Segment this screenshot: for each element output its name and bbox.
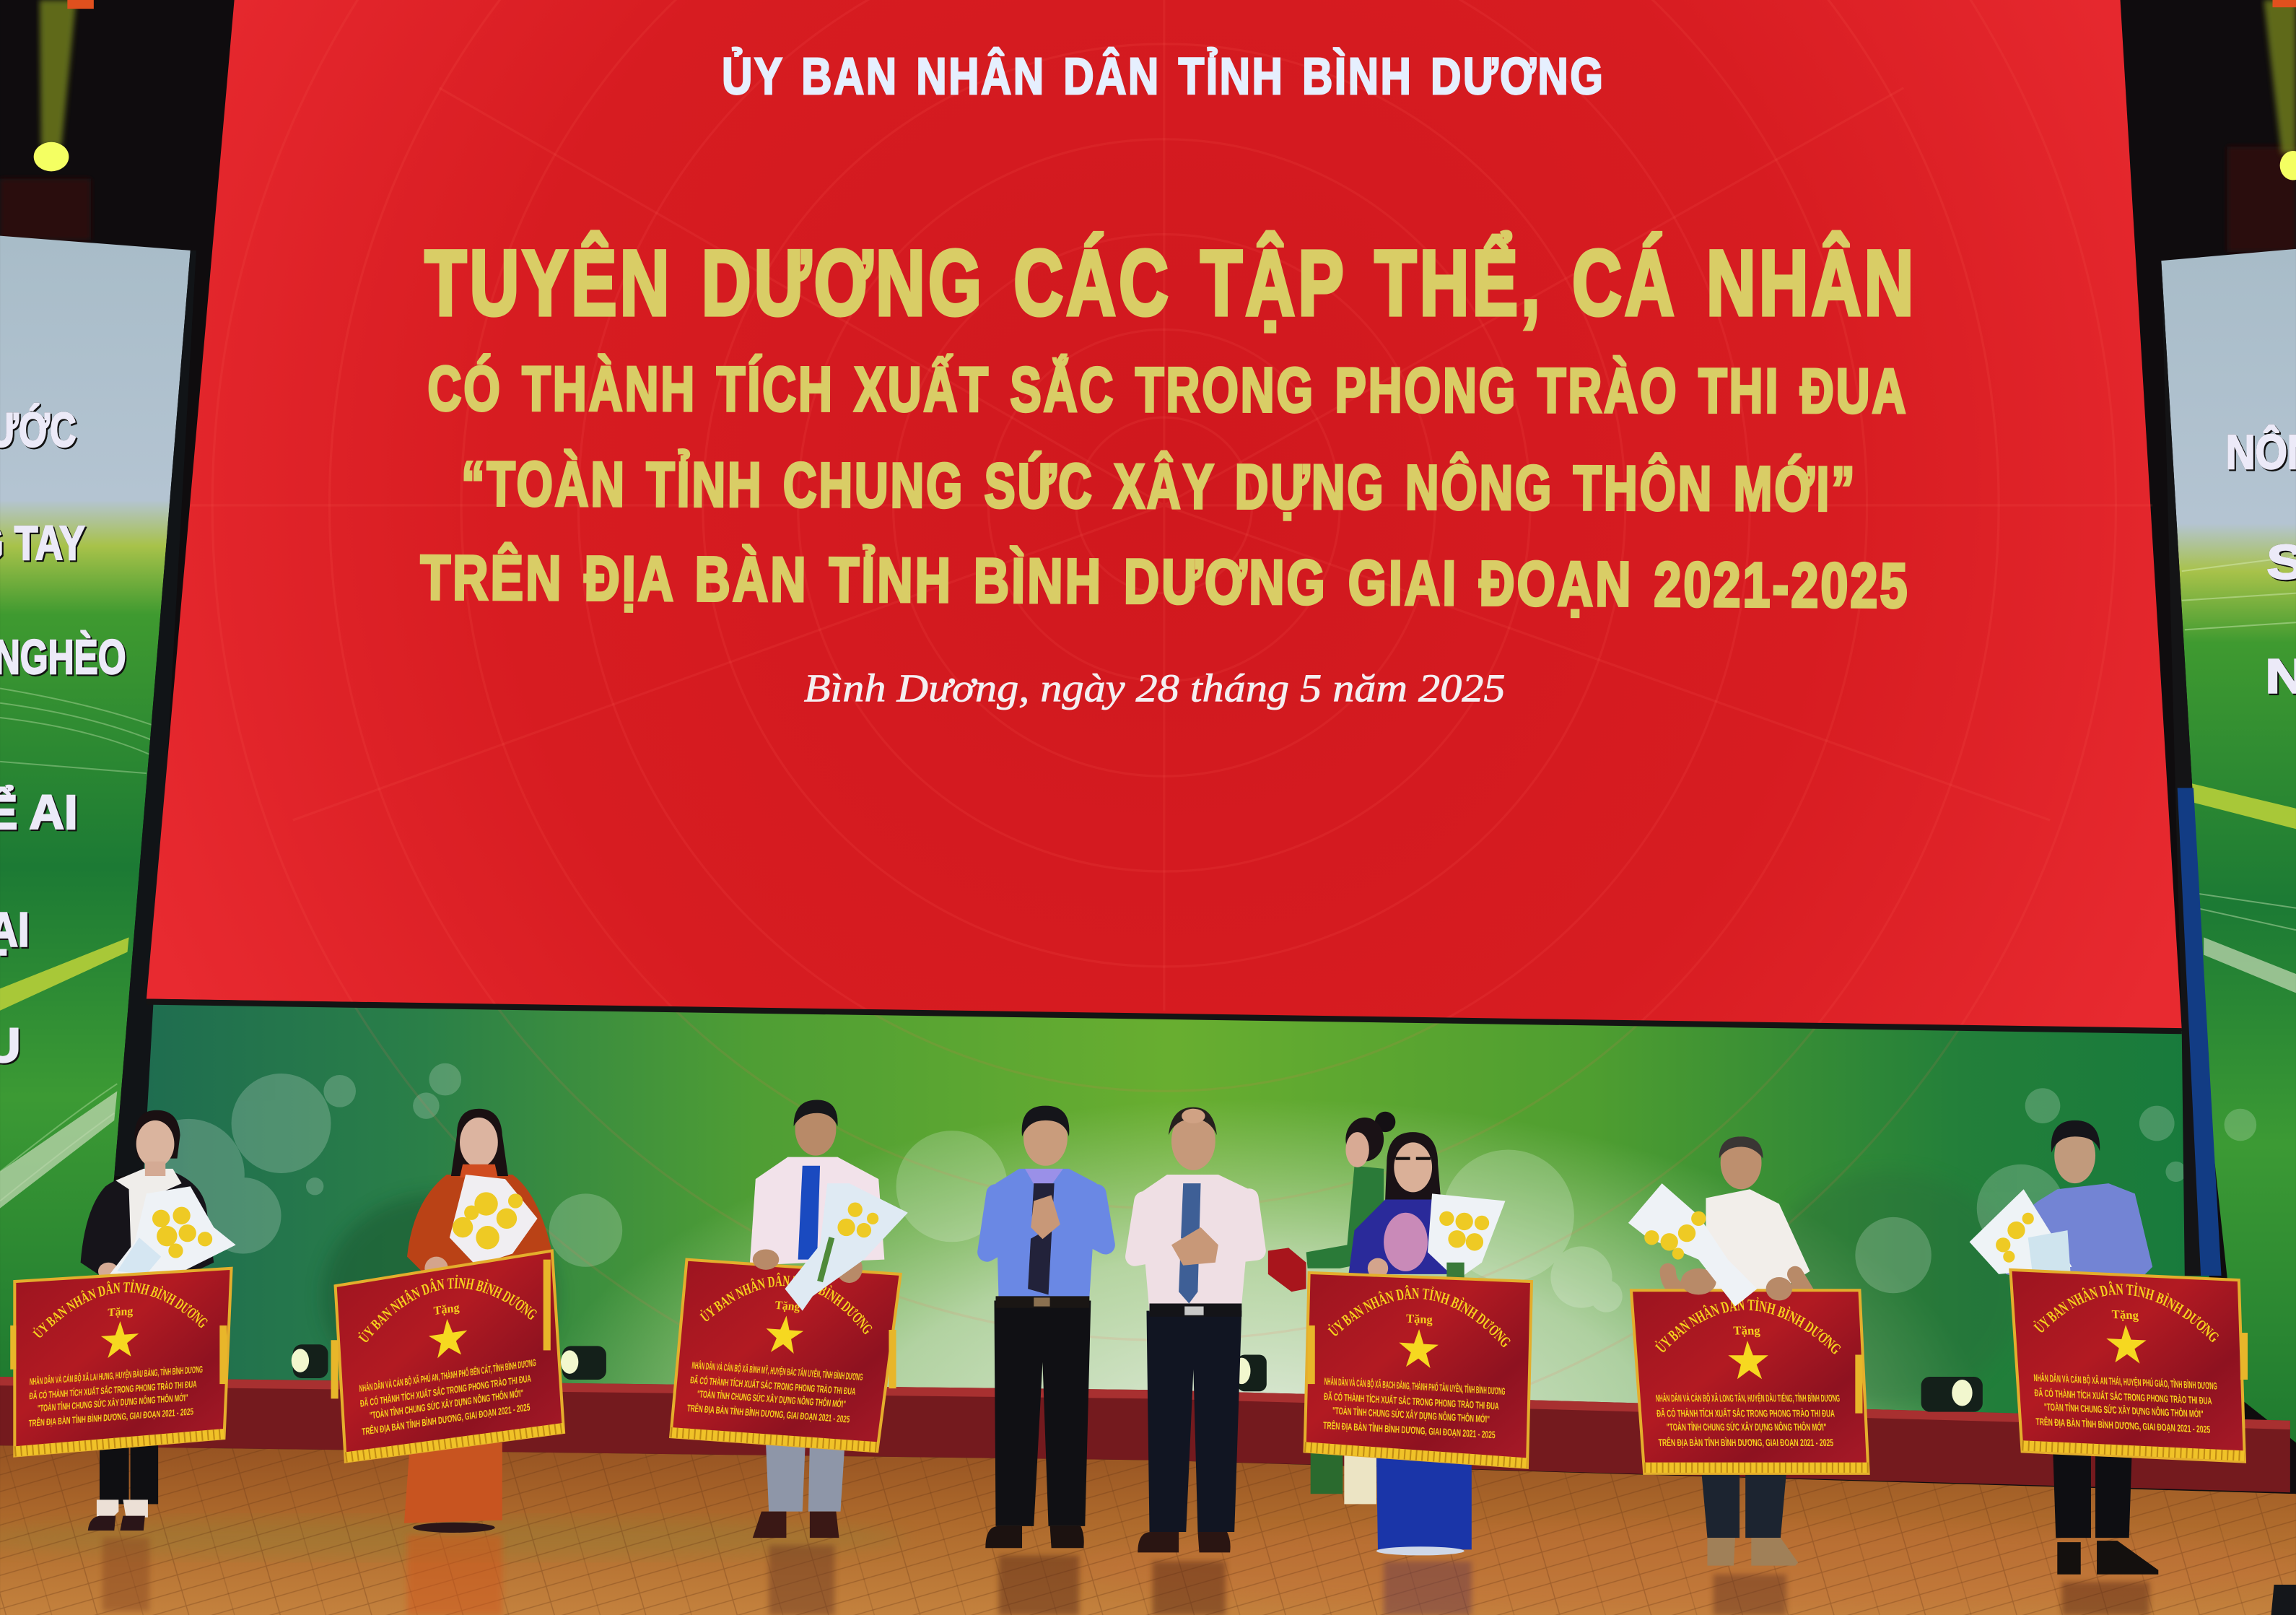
- panel: left side LED screen: [0, 236, 191, 1384]
- bouquet 8 with hands: [1628, 1183, 1792, 1307]
- stage floor: [0, 1445, 2296, 1615]
- flag 1: NHÂN DÂN VÀ CÁN BỘ XÃ LAI HƯNG, HUYỆN BÀU BÀNG, TỈNH BÌNH DƯƠNG: [30, 1364, 203, 1387]
- title line 4: TRÊN ĐỊA BÀN TỈNH BÌNH DƯƠNG GIAI ĐOẠN 2021-2025: [420, 542, 1910, 621]
- flag 3: [668, 1258, 902, 1453]
- flag 5: ĐÃ CÓ THÀNH TÍCH XUẤT SẮC TRONG PHONG TRÀO THI ĐUA: [1656, 1407, 1835, 1419]
- flag 4: ĐÃ CÓ THÀNH TÍCH XUẤT SẮC TRONG PHONG TRÀO THI ĐUA: [1324, 1390, 1499, 1412]
- flag 3: ỦY BAN NHÂN DÂN TỈNH BÌNH DƯƠNG: [699, 1272, 872, 1334]
- flag 2: ỦY BAN NHÂN DÂN TỈNH BÌNH DƯƠNG: [358, 1275, 537, 1342]
- flag 6: ỦY BAN NHÂN DÂN TỈNH BÌNH DƯƠNG: [2033, 1281, 2219, 1343]
- flag 2: Tặng: [433, 1300, 460, 1318]
- panel: right side LED screen: [2161, 249, 2296, 1442]
- drum pattern: [191, 0, 2152, 1458]
- flag 5: NHÂN DÂN VÀ CÁN BỘ XÃ LONG TÂN, HUYỆN DẦU TIẾNG, TỈNH BÌNH DƯƠNG: [1655, 1391, 1840, 1404]
- flag 4: [1304, 1271, 1533, 1469]
- flag 5: Tặng: [1733, 1323, 1761, 1338]
- heading: issuing authority: ỦY BAN NHÂN DÂN TỈNH BÌNH DƯƠNG: [722, 48, 1605, 105]
- person 8: man in white short-sleeve shirt: [1668, 1136, 1810, 1566]
- bouquet 9: [1970, 1189, 2072, 1274]
- stage lights: [292, 1344, 1983, 1412]
- bouquet 2: [450, 1175, 538, 1266]
- flag 1: [10, 1266, 233, 1458]
- person 2: woman in orange ao dai: [404, 1109, 552, 1533]
- person 3: man with blue tie: [750, 1100, 884, 1538]
- flag 6: [2010, 1270, 2248, 1462]
- flag 3: Tặng: [774, 1300, 800, 1313]
- person 7: woman in blue ao dai: [1348, 1132, 1472, 1555]
- person 1: woman in black jacket: [81, 1110, 214, 1531]
- flag 5: TRÊN ĐỊA BÀN TỈNH BÌNH DƯƠNG, GIAI ĐOẠN 2021 - 2025: [1658, 1436, 1834, 1448]
- flag 1: Tặng: [108, 1305, 134, 1319]
- bouquet 1: [110, 1186, 236, 1274]
- person 9: man in blue shirt: [1991, 1120, 2158, 1575]
- screen bottom edge: [147, 999, 2182, 1034]
- flag 4: Tặng: [1406, 1311, 1433, 1327]
- flag 1: ĐÃ CÓ THÀNH TÍCH XUẤT SẮC TRONG PHONG TRÀO THI ĐUA: [29, 1378, 197, 1401]
- flag 4: ỦY BAN NHÂN DÂN TỈNH BÌNH DƯƠNG: [1328, 1285, 1511, 1347]
- person 5: official in checked shirt: [1135, 1107, 1257, 1552]
- person 6: attendant in green ao dai: [1268, 1112, 1395, 1504]
- flag 1: "TOÀN TỈNH CHUNG SỨC XÂY DỰNG NÔNG THÔN MỚI": [38, 1392, 188, 1414]
- date line: Bình Dương, ngày 28 tháng 5 năm 2025: [804, 666, 1505, 710]
- pole left: [114, 251, 196, 1176]
- flag 3: "TOÀN TỈNH CHUNG SỨC XÂY DỰNG NÔNG THÔN MỚI": [697, 1388, 847, 1410]
- flag 1: ỦY BAN NHÂN DÂN TỈNH BÌNH DƯƠNG: [32, 1279, 208, 1338]
- title line 3: “TOÀN TỈNH CHUNG SỨC XÂY DỰNG NÔNG THÔN MỚI”: [461, 448, 1857, 524]
- flag 2: [331, 1249, 566, 1463]
- flag 6: Tặng: [2111, 1307, 2139, 1323]
- panel: central green backdrop: [102, 1002, 2256, 1442]
- side screen slogans right: [2226, 425, 2296, 704]
- bouquet 3 with hands: [753, 1183, 908, 1311]
- flag 2: NHÂN DÂN VÀ CÁN BỘ XÃ PHÚ AN, THÀNH PHỐ BẾN CÁT, TỈNH BÌNH DƯƠNG: [359, 1357, 536, 1394]
- flag 4: NHÂN DÂN VÀ CÁN BỘ XÃ BẠCH ĐẰNG, THÀNH PHỐ TÂN UYÊN, TỈNH BÌNH DƯƠNG: [1324, 1375, 1506, 1397]
- left spotlight: [34, 0, 94, 171]
- flag 3: NHÂN DÂN VÀ CÁN BỘ XÃ BÌNH MỸ, HUYỆN BẮC TÂN UYÊN, TỈNH BÌNH DƯƠNG: [691, 1359, 863, 1383]
- pole right: [2161, 261, 2222, 1276]
- right spotlight: [2264, 0, 2296, 180]
- flag 2: ĐÃ CÓ THÀNH TÍCH XUẤT SẮC TRONG PHONG TRÀO THI ĐUA: [359, 1373, 532, 1409]
- flag 5: [1631, 1290, 1869, 1473]
- flag 1: TRÊN ĐỊA BÀN TỈNH BÌNH DƯƠNG, GIAI ĐOẠN 2021 - 2025: [29, 1406, 193, 1429]
- flag 3: TRÊN ĐỊA BÀN TỈNH BÌNH DƯƠNG, GIAI ĐOẠN 2021 - 2025: [686, 1403, 850, 1425]
- flag 5: ỦY BAN NHÂN DÂN TỈNH BÌNH DƯƠNG: [1654, 1297, 1841, 1354]
- flag 2: TRÊN ĐỊA BÀN TỈNH BÌNH DƯƠNG, GIAI ĐOẠN 2021 - 2025: [362, 1401, 531, 1437]
- flag 3: ĐÃ CÓ THÀNH TÍCH XUẤT SẮC TRONG PHONG TRÀO THI ĐUA: [689, 1375, 857, 1397]
- flag 4: TRÊN ĐỊA BÀN TỈNH BÌNH DƯƠNG, GIAI ĐOẠN 2021 - 2025: [1323, 1419, 1496, 1440]
- flag 5: "TOÀN TỈNH CHUNG SỨC XÂY DỰNG NÔNG THÔN MỚI": [1666, 1421, 1827, 1433]
- bouquet 6: [1428, 1193, 1505, 1280]
- panel: main red LED screen: [147, 0, 2182, 1458]
- flag 2: "TOÀN TỈNH CHUNG SỨC XÂY DỰNG NÔNG THÔN MỚI": [370, 1388, 523, 1422]
- stage riser: [0, 1377, 2290, 1492]
- flag 4: "TOÀN TỈNH CHUNG SỨC XÂY DỰNG NÔNG THÔN MỚI": [1332, 1403, 1490, 1425]
- side screen slogans: [0, 404, 126, 1073]
- person 4: official in blue shirt: [985, 1106, 1106, 1548]
